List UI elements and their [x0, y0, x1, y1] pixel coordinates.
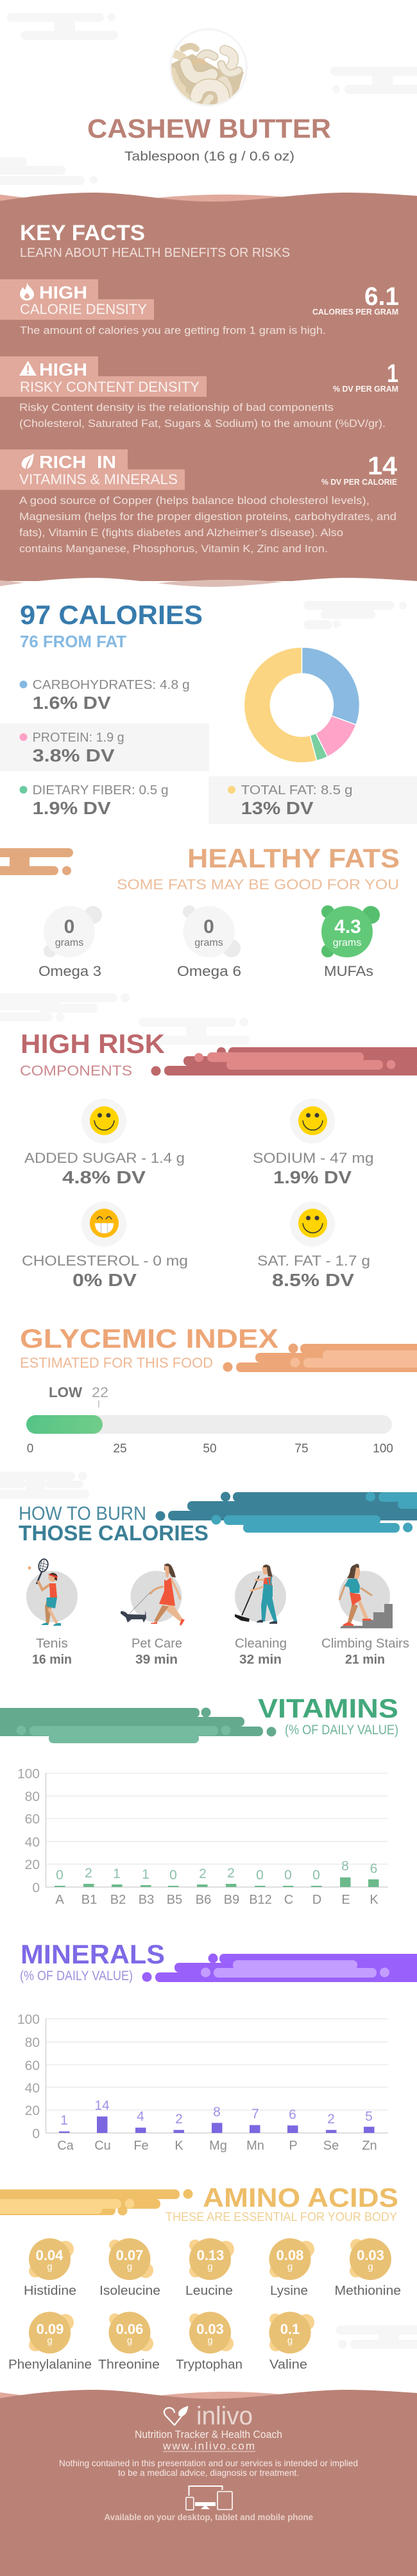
subheading: estimated: ESTIMATED FOR THIS FOOD: [20, 1355, 213, 1371]
amino: isoleucine: g: [127, 2261, 132, 2272]
label: high: HIGH: [39, 283, 87, 302]
bar chart: minerals: 6: [289, 2107, 296, 2122]
stat: 1: 1: [387, 360, 398, 388]
heading: amino acids: AMINO ACIDS: [203, 2182, 398, 2213]
amino: histidine: g: [47, 2261, 53, 2272]
gauge axis: 25: [113, 1442, 127, 1456]
amino: methionine: g: [368, 2261, 373, 2272]
description: A good source of Copper (helps balance blood cholesterol levels),: [19, 494, 370, 507]
bar chart: vitamins: 2: [85, 1866, 92, 1881]
heading: 97 calories: 97 CALORIES: [20, 600, 203, 630]
item: saturated fat: SAT. FAT - 1.7 g: [257, 1253, 370, 1269]
bar chart: vitamins: 80: [25, 1789, 40, 1804]
bar chart: vitamins: 2: [227, 1866, 235, 1881]
decoration: healthy fats: [0, 848, 73, 875]
bar chart: vitamins: 60: [25, 1812, 40, 1827]
panel: footer: [0, 2390, 417, 2576]
panel: how to burn calories: [19, 1492, 417, 1667]
item: sodium: 1.9% DV: [273, 1167, 352, 1187]
item: sodium: [253, 1099, 373, 1187]
macro: carbohydrates: [19, 678, 190, 713]
activity: tennis: Tenis: [36, 1637, 68, 1651]
amino: leucine: [185, 2238, 234, 2298]
heading: those calories: THOSE CALORIES: [19, 1521, 208, 1545]
label: high: HIGH: [39, 360, 87, 379]
amino: methionine: Methionine: [335, 2284, 401, 2298]
description: (Cholesterol, Saturated Fat, Sugars & Sodium) to the amount (%DV/gr).: [19, 417, 386, 430]
bar chart: vitamins: D: [312, 1893, 321, 1907]
amino: leucine: Leucine: [185, 2284, 233, 2298]
heading: healthy fats: HEALTHY FATS: [187, 843, 400, 873]
bar chart: vitamins: 6: [370, 1861, 377, 1876]
bar chart: vitamins: A: [55, 1893, 64, 1907]
label: vitamins and minerals: VITAMINS & MINERALS: [19, 471, 178, 487]
bar chart: vitamins: B12: [249, 1893, 272, 1907]
panel: amino acids: [0, 2182, 417, 2372]
bar chart: minerals: Mg: [209, 2139, 227, 2153]
panel: calories: [0, 600, 417, 824]
description: fats), Vitamin E (fights diabetes and Alzheimer’s disease). Also: [19, 527, 343, 539]
amino: tryptophan: g: [207, 2335, 213, 2346]
stat unit: CALORIES PER GRAM: [312, 307, 398, 317]
bar chart: vitamins: 2: [199, 1867, 207, 1881]
decoration: glycemic index: [223, 1343, 417, 1372]
bar chart: minerals: Cu: [94, 2139, 111, 2153]
macro: carbohydrates: CARBOHYDRATES: 4.8 g: [33, 678, 190, 692]
gauge axis: 50: [203, 1442, 217, 1456]
title: CASHEW BUTTER: [87, 113, 331, 144]
amino: lysine: Lysine: [270, 2284, 308, 2298]
bar chart: minerals: 4: [137, 2109, 144, 2124]
decoration: amino acids: [0, 2189, 192, 2215]
figure: woman walking dog: [121, 1563, 185, 1626]
donut chart: [244, 647, 360, 763]
amino: lysine: [269, 2238, 314, 2298]
macro: protein: PROTEIN: 1.9 g: [33, 731, 124, 745]
activity: pet care: 39 min: [135, 1653, 178, 1667]
bar chart: minerals: P: [289, 2139, 298, 2153]
amino: lysine: g: [287, 2261, 293, 2272]
item: cholesterol: CHOLESTEROL - 0 mg: [22, 1253, 188, 1269]
bar chart: vitamins: 0: [284, 1868, 292, 1883]
availability note: Available on your desktop, tablet and mobile phone: [104, 2512, 313, 2522]
bar chart: minerals: Ca: [57, 2139, 74, 2153]
item: omega 6: grams: [194, 937, 223, 948]
amino: lysine: 0.08: [277, 2247, 303, 2263]
description: Magnesium (helps for the proper digestion proteins, carbohydrates, and: [19, 510, 396, 523]
gauge axis: 100: [373, 1442, 393, 1456]
item: omega 6: Omega 6: [177, 963, 241, 979]
decoration: high risk: [151, 1047, 417, 1076]
background clouds: high risk: [0, 993, 250, 1045]
bar chart: minerals: Mn: [246, 2139, 264, 2153]
decoration: minerals: [142, 1953, 417, 1982]
panel: vitamins: [0, 1693, 398, 1907]
logo text: inlivo: [196, 2402, 253, 2430]
bar chart: minerals: 7: [251, 2107, 259, 2121]
bar chart: vitamins: 100: [17, 1767, 40, 1781]
bar chart: vitamins: 1: [142, 1867, 149, 1882]
activity: tennis: [26, 1558, 78, 1667]
amino: valine: 0.1: [280, 2321, 300, 2337]
bar chart: vitamins: 0: [169, 1868, 177, 1883]
amino: tryptophan: [176, 2311, 243, 2372]
amino: threonine: g: [127, 2335, 132, 2346]
gauge label: low: LOW: [49, 1384, 82, 1400]
fact: risky content density: [0, 356, 398, 430]
bar chart: minerals: 20: [25, 2103, 40, 2118]
figure: woman climbing stairs: [339, 1564, 393, 1628]
stat unit: % DV PER CALORIE: [321, 477, 397, 487]
macro: total fat: TOTAL FAT: 8.5 g: [241, 783, 353, 797]
item: added sugar: 4.8% DV: [62, 1167, 146, 1187]
panel: glycemic index: [20, 1323, 417, 1456]
macro: dietary fiber: [19, 783, 169, 818]
amino: isoleucine: [99, 2238, 160, 2298]
amino: valine: [269, 2311, 314, 2372]
bar chart: vitamins: 40: [25, 1835, 40, 1850]
description: [19, 494, 396, 555]
bar chart: minerals: 8: [213, 2105, 221, 2119]
icon: devices: [186, 2486, 232, 2510]
heading: how to burn: HOW TO BURN: [19, 1503, 146, 1524]
item: omega 3: 0: [64, 916, 74, 937]
activity: cleaning: Cleaning: [235, 1637, 287, 1651]
bar chart: minerals: K: [174, 2139, 183, 2153]
decoration: burn calories: [155, 1492, 417, 1533]
food photo: cashews: [171, 42, 244, 105]
activity: cleaning: [235, 1565, 287, 1667]
item: cholesterol: 0% DV: [72, 1270, 137, 1290]
bar chart: vitamins: C: [284, 1893, 293, 1907]
panel: high risk: [20, 1029, 417, 1290]
bar chart: vitamins: B5: [167, 1893, 182, 1907]
macro: dietary fiber: DIETARY FIBER: 0.5 g: [33, 783, 169, 797]
stat: 6.1: 6.1: [364, 283, 399, 311]
gauge axis: 75: [294, 1442, 309, 1456]
bar chart: minerals: 14: [94, 2098, 110, 2113]
website: www.inlivo.com: [162, 2440, 255, 2452]
icon: flame: [20, 283, 34, 300]
subheading: essential: THESE ARE ESSENTIAL FOR YOUR BODY: [166, 2211, 397, 2224]
amino: tryptophan: Tryptophan: [176, 2358, 243, 2372]
description: Risky Content density is the relationship of bad components: [19, 401, 334, 413]
icon: laughing face: [90, 1208, 119, 1238]
item: MUFAs: 4.3: [334, 916, 361, 937]
icon: smiling face: [90, 1106, 119, 1135]
description: [19, 401, 386, 430]
activity: tennis: 16 min: [32, 1653, 72, 1667]
activity: climbing stairs: Climbing Stairs: [321, 1637, 409, 1651]
item: MUFAs: [321, 905, 380, 979]
item: cholesterol: [22, 1202, 188, 1290]
logo icon: heart and leaf: [164, 2406, 189, 2425]
bar chart: minerals: Se: [323, 2139, 339, 2153]
item: omega 6: [177, 905, 241, 979]
description: The amount of calories you are getting from 1 gram is high.: [20, 324, 326, 336]
item: MUFAs: MUFAs: [324, 963, 373, 979]
amino: leucine: g: [207, 2261, 213, 2272]
serving size: Tablespoon (16 g / 0.6 oz): [124, 150, 294, 164]
activity: pet care: Pet Care: [132, 1637, 182, 1651]
activity: cleaning: 32 min: [239, 1653, 282, 1667]
figure: woman cleaning: [235, 1565, 277, 1624]
bar chart: minerals: 60: [25, 2058, 40, 2073]
amino: methionine: 0.03: [357, 2247, 384, 2263]
figure: tennis player: [28, 1558, 61, 1626]
bar chart: minerals: 100: [17, 2012, 40, 2027]
decoration: vitamins: [0, 1708, 276, 1743]
item: omega 6: 0: [203, 916, 214, 937]
gauge bar: [26, 1415, 392, 1434]
fact: calorie density: [0, 279, 399, 336]
macro: protein: 3.8% DV: [33, 745, 115, 765]
label: calorie density: CALORIE DENSITY: [20, 301, 147, 317]
subheading: healthy fats: SOME FATS MAY BE GOOD FOR YOU: [117, 876, 399, 892]
bar chart: vitamins: 20: [25, 1858, 40, 1872]
activity: pet care: [121, 1563, 185, 1667]
amino: valine: g: [287, 2335, 293, 2346]
bar chart: minerals: [17, 2012, 388, 2153]
bar chart: vitamins: 0: [56, 1868, 64, 1883]
panel: key facts: [0, 193, 417, 597]
subheading: key facts: LEARN ABOUT HEALTH BENEFITS OR RISKS: [20, 246, 290, 260]
item: omega 3: grams: [55, 937, 83, 948]
subheading: 76 from fat: 76 FROM FAT: [20, 632, 126, 651]
panel: healthy fats: [0, 843, 400, 979]
amino: threonine: 0.06: [116, 2321, 143, 2337]
bar chart: vitamins: 0: [312, 1868, 320, 1883]
background cloud: burn calories: [0, 1472, 89, 1499]
bar chart: vitamins: B3: [139, 1893, 154, 1907]
bar chart: vitamins: 0: [32, 1881, 40, 1895]
gauge axis: 0: [27, 1442, 33, 1456]
bar chart: minerals: 0: [32, 2127, 40, 2141]
amino: valine: Valine: [269, 2358, 307, 2372]
stat unit: % DV PER GRAM: [333, 384, 398, 394]
subheading: percent of daily value: (% OF DAILY VALUE): [285, 1723, 398, 1737]
bar chart: minerals: 80: [25, 2035, 40, 2050]
heading: key facts: KEY FACTS: [20, 221, 145, 245]
bar chart: vitamins: B1: [81, 1893, 97, 1907]
macro: total fat: 13% DV: [241, 798, 314, 818]
item: omega 3: Omega 3: [38, 963, 101, 979]
amino: phenylalanine: Phenylalanine: [8, 2358, 92, 2372]
macro: dietary fiber: 1.9% DV: [33, 798, 111, 818]
description: contains Manganese, Phosphorus, Vitamin K, Zinc and Iron.: [19, 543, 328, 555]
stat: 14: 14: [368, 452, 398, 480]
item: saturated fat: [257, 1202, 370, 1290]
amino: leucine: 0.13: [197, 2247, 224, 2263]
amino: isoleucine: 0.07: [116, 2247, 143, 2263]
bar chart: vitamins: [17, 1767, 388, 1907]
bar chart: vitamins: 1: [113, 1867, 121, 1881]
amino: histidine: 0.04: [36, 2247, 64, 2263]
amino: histidine: Histidine: [24, 2284, 76, 2298]
item: omega 3: [38, 906, 102, 979]
bar chart: minerals: 40: [25, 2081, 40, 2096]
subheading: percent of daily value: (% OF DAILY VALUE): [20, 1969, 133, 1983]
icon: smiling face: [298, 1106, 327, 1135]
bar chart: vitamins: K: [370, 1893, 379, 1907]
tagline: Nutrition Tracker & Health Coach: [135, 2428, 282, 2441]
icon: smiling face: [298, 1208, 327, 1238]
icon: leaf: [22, 453, 34, 469]
bar chart: vitamins: E: [341, 1893, 350, 1907]
macro: protein: [0, 724, 209, 771]
amino: methionine: [335, 2238, 401, 2298]
activity: climbing stairs: [321, 1564, 409, 1667]
panel: minerals: [17, 1939, 417, 2153]
label: rich in: RICH IN: [39, 452, 116, 472]
disclaimer: Nothing contained in this presentation and our services is intended or implied: [59, 2458, 358, 2468]
bar chart: vitamins: 0: [256, 1868, 264, 1883]
amino: threonine: Threonine: [98, 2358, 160, 2372]
bar chart: minerals: Fe: [133, 2139, 149, 2153]
gauge axis: [27, 1442, 393, 1456]
label: risky content density: RISKY CONTENT DENSITY: [20, 379, 200, 395]
icon: warning: [19, 361, 37, 376]
bar chart: vitamins: B6: [196, 1893, 211, 1907]
bar chart: vitamins: B2: [110, 1893, 126, 1907]
macro: carbohydrates: 1.6% DV: [33, 693, 111, 713]
bar chart: vitamins: B9: [224, 1893, 239, 1907]
bar chart: minerals: 5: [365, 2109, 373, 2124]
amino: tryptophan: 0.03: [196, 2321, 224, 2337]
heading: minerals: MINERALS: [21, 1939, 165, 1969]
amino: threonine: [98, 2311, 160, 2372]
amino: histidine: [24, 2238, 76, 2298]
disclaimer: to be a medical advice, diagnosis or treatment.: [118, 2467, 299, 2478]
bar chart: vitamins: 8: [341, 1859, 349, 1874]
disclaimer: [59, 2458, 358, 2478]
food photo ring: [171, 30, 246, 105]
bar chart: minerals: 2: [327, 2112, 335, 2127]
activity: climbing stairs: 21 min: [345, 1653, 385, 1667]
heading: vitamins: VITAMINS: [258, 1693, 398, 1723]
item: saturated fat: 8.5% DV: [272, 1270, 354, 1290]
heading: glycemic index: GLYCEMIC INDEX: [20, 1323, 278, 1353]
background clouds: header: [0, 13, 417, 185]
macro: total fat: [208, 776, 417, 824]
bar chart: minerals: Zn: [362, 2139, 377, 2153]
fact: rich in vitamins and minerals: [0, 449, 398, 555]
bar chart: minerals: 1: [60, 2113, 68, 2128]
amino: phenylalanine: [8, 2311, 92, 2372]
heading: high risk: HIGH RISK: [21, 1029, 165, 1059]
item: MUFAs: grams: [333, 937, 361, 948]
bar chart: minerals: 2: [175, 2112, 183, 2127]
gauge value: 22: 22: [92, 1384, 108, 1400]
item: sodium: SODIUM - 47 mg: [253, 1150, 373, 1166]
item: added sugar: ADDED SUGAR - 1.4 g: [24, 1150, 185, 1166]
subheading: components: COMPONENTS: [20, 1063, 132, 1079]
amino: phenylalanine: 0.09: [37, 2321, 64, 2337]
amino: phenylalanine: g: [47, 2335, 53, 2346]
item: added sugar: [24, 1099, 185, 1187]
amino: isoleucine: Isoleucine: [99, 2284, 160, 2298]
